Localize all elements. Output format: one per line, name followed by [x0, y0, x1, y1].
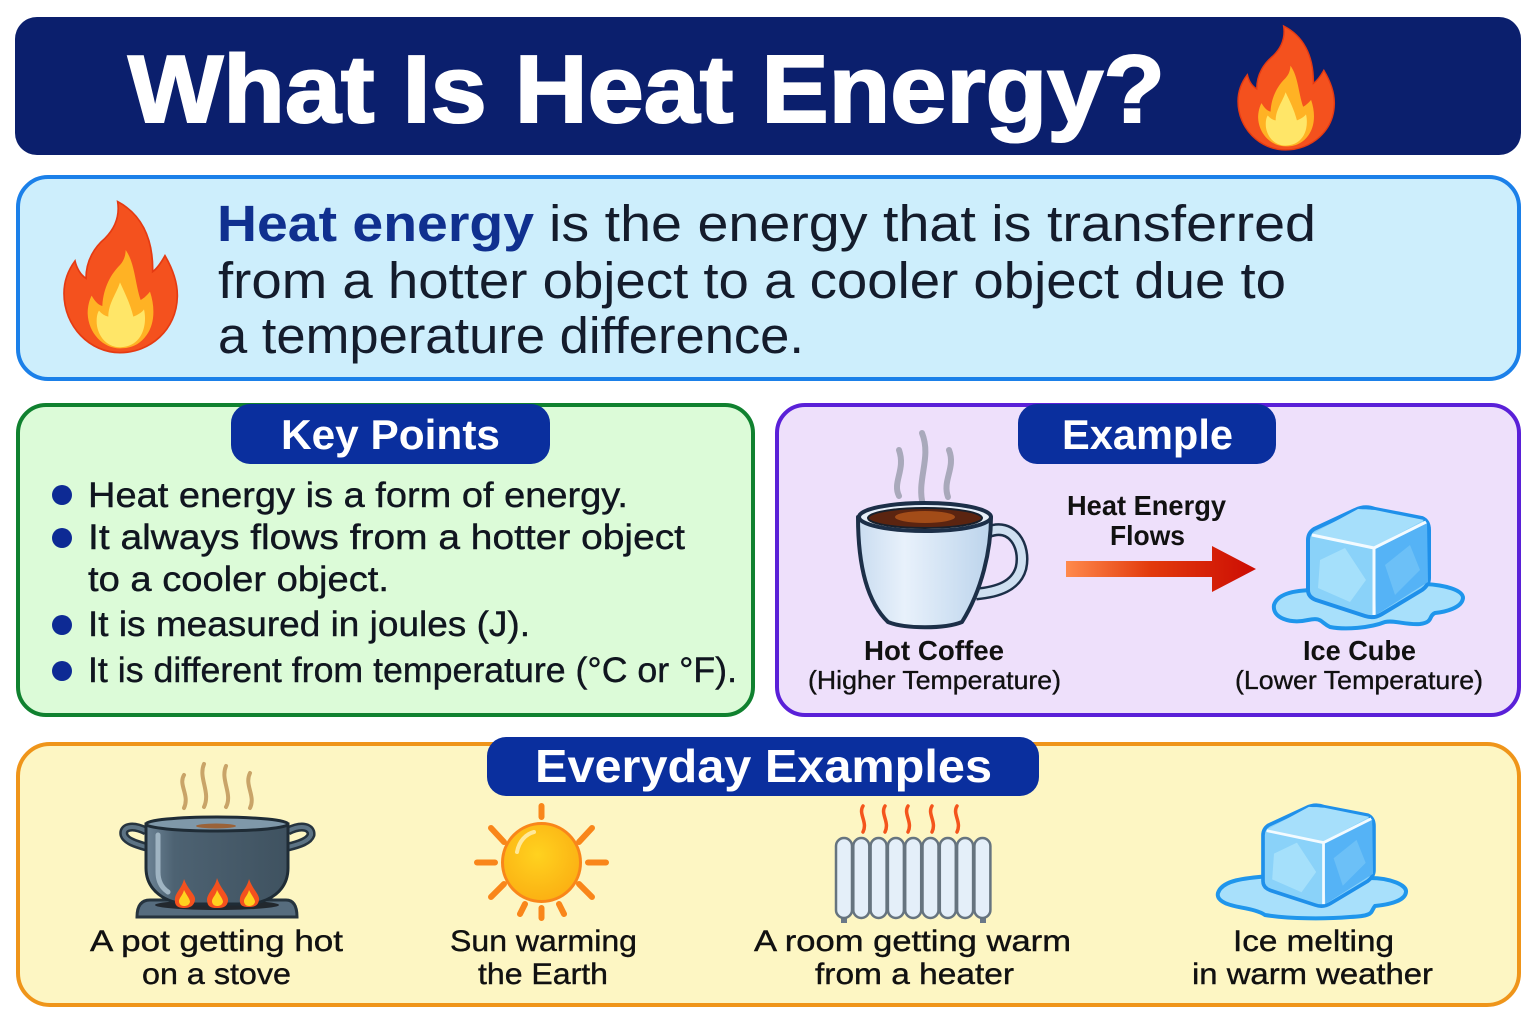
panel: definition	[18, 177, 1519, 379]
icon: melting ice	[1218, 805, 1406, 918]
icon: sun	[477, 806, 606, 918]
heading: everyday examples: Everyday Examples	[535, 740, 992, 792]
bullet list: It is measured in joules (J).	[88, 605, 530, 644]
caption: pot: on a stove	[142, 958, 291, 991]
caption: radiator: A room getting warm	[754, 925, 1071, 958]
heading: key points	[231, 404, 550, 464]
arrow label	[1067, 490, 1226, 551]
panel: everyday examples	[18, 737, 1519, 1005]
arrow label: Heat Energy	[1067, 490, 1226, 521]
flames	[175, 878, 259, 908]
icon: title flame	[1238, 26, 1334, 150]
definition text: is the energy that is transferred	[549, 195, 1316, 252]
heading: example	[1018, 404, 1276, 464]
caption: ice: Ice melting	[1233, 925, 1394, 958]
icon: definition flame	[64, 202, 177, 353]
caption: ice: in warm weather	[1192, 958, 1433, 991]
caption: pot	[90, 925, 344, 991]
caption: sun: Sun warming	[450, 925, 637, 958]
label: ice cube	[1235, 635, 1483, 695]
definition text	[217, 195, 1316, 364]
icon: radiator	[836, 806, 990, 923]
arrow label: Flows	[1110, 520, 1185, 551]
label: ice cube: Ice Cube	[1303, 635, 1416, 666]
definition text: Heat energy	[217, 195, 535, 252]
bullet list: It always flows from a hotter object	[88, 518, 685, 557]
bullet list: Heat energy is a form of energy.	[88, 476, 628, 515]
label: ice cube: (Lower Temperature)	[1235, 665, 1483, 695]
label: hot coffee: (Higher Temperature)	[808, 665, 1061, 695]
panel: key points	[18, 404, 753, 715]
title banner	[15, 17, 1521, 155]
label: hot coffee	[808, 635, 1061, 695]
bullet list: It is different from temperature (°C or °F).	[88, 651, 737, 690]
caption: sun	[450, 925, 637, 991]
icon: hot coffee cup	[858, 433, 1022, 627]
bullet list	[52, 476, 737, 690]
caption: radiator	[754, 925, 1071, 991]
caption: radiator: from a heater	[815, 958, 1014, 991]
heading: key points: Key Points	[281, 411, 500, 458]
caption: ice	[1192, 925, 1433, 991]
caption: sun: the Earth	[478, 958, 608, 991]
label: hot coffee: Hot Coffee	[864, 635, 1004, 666]
icon: pot on stove	[124, 764, 311, 917]
bullet list: to a cooler object.	[88, 560, 389, 599]
definition text: a temperature difference.	[218, 307, 804, 364]
title: What Is Heat Energy?	[128, 36, 1165, 143]
definition text: from a hotter object to a cooler object due to	[218, 252, 1286, 309]
icon: ice cube	[1274, 507, 1463, 628]
heading: everyday examples	[487, 737, 1039, 796]
arrow: heat flow	[1066, 490, 1256, 592]
heading: example: Example	[1062, 411, 1233, 458]
caption: pot: A pot getting hot	[90, 925, 344, 958]
panel: example	[777, 404, 1519, 715]
